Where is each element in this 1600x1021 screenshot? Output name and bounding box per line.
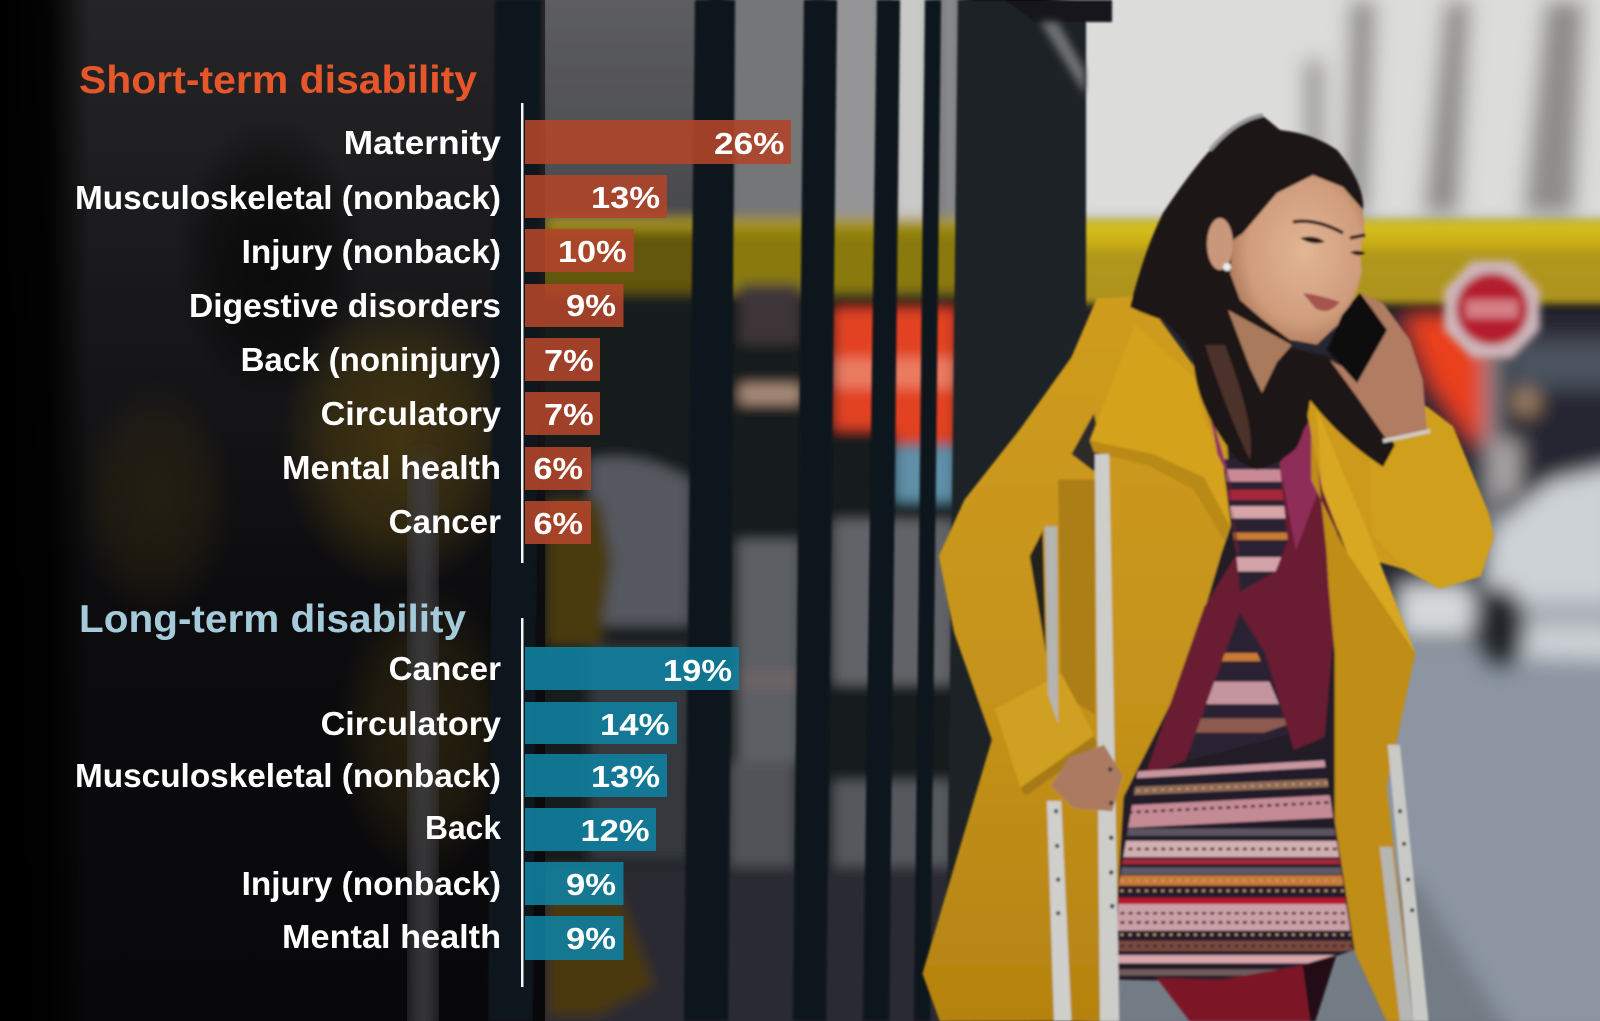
category labels: Circulatory — [321, 705, 502, 742]
lower second crutch — [1047, 801, 1071, 1021]
face — [1230, 175, 1365, 345]
dark slit beside sleeve — [1030, 531, 1046, 653]
bars — [525, 120, 791, 544]
category labels — [75, 650, 502, 955]
heading: short-term disability: Short-term disability — [79, 59, 477, 102]
category labels: Musculoskeletal (nonback) — [75, 757, 501, 794]
head and hair — [1130, 115, 1430, 470]
category labels — [75, 124, 502, 540]
yellow canopy — [1070, 220, 1600, 304]
percentage values: 10% — [558, 234, 626, 269]
phone — [1327, 293, 1387, 383]
category labels: Cancer — [389, 650, 501, 687]
burgundy vest — [1145, 403, 1338, 777]
category labels: Musculoskeletal (nonback) — [75, 179, 501, 216]
percentage values: 6% — [534, 451, 583, 486]
percentage values: 13% — [591, 180, 660, 215]
torso base — [1112, 408, 1357, 982]
category labels: Digestive disorders — [189, 287, 501, 324]
right crutches — [1388, 745, 1429, 1021]
hand holding phone — [1330, 292, 1427, 440]
stop sign — [1444, 261, 1540, 358]
category labels: Cancer — [389, 503, 501, 540]
brows and eyes — [1293, 221, 1365, 238]
bracelet — [1383, 431, 1430, 441]
percentage values: 7% — [544, 397, 594, 432]
sleeve cuff — [995, 673, 1094, 788]
percentage values — [566, 653, 732, 956]
earring — [1223, 263, 1231, 271]
blurred right street background — [1060, 0, 1600, 1021]
underarm pad — [1071, 413, 1102, 471]
striped top — [1189, 459, 1296, 760]
tights — [1154, 961, 1310, 1021]
panel: short-term disability chart — [75, 59, 791, 563]
category labels: Circulatory — [321, 395, 502, 432]
category labels: Injury (nonback) — [242, 233, 501, 270]
category labels: Back (noninjury) — [241, 341, 501, 378]
percentage values: 7% — [544, 343, 594, 378]
category labels: Injury (nonback) — [242, 865, 501, 902]
coat right panel — [1311, 406, 1415, 1021]
mouth — [1303, 293, 1340, 311]
window frame bars — [488, 0, 1112, 1021]
left darkened panel with reflection of woman — [0, 0, 545, 1021]
percentage values: 9% — [566, 867, 616, 902]
percentage values: 14% — [600, 707, 670, 742]
percentage values: 26% — [714, 126, 784, 161]
percentage values: 9% — [566, 288, 616, 323]
striped skirt — [1112, 753, 1357, 990]
category labels: Back — [425, 809, 502, 846]
axis line — [521, 618, 524, 987]
bars — [525, 647, 739, 960]
blurred awning highlight — [1040, 22, 1085, 95]
panel: long-term disability chart — [75, 598, 739, 987]
main crutch — [1095, 454, 1119, 1021]
neck — [1228, 310, 1292, 393]
shading between crutches — [1058, 480, 1095, 714]
heading: long-term disability: Long-term disability — [79, 598, 466, 641]
percentage values: 19% — [663, 653, 732, 688]
percentage values: 9% — [566, 921, 616, 956]
percentage values: 13% — [591, 759, 660, 794]
percentage values: 6% — [534, 506, 583, 541]
percentage values — [534, 126, 784, 541]
category labels: Mental health — [282, 918, 501, 955]
category labels: Maternity — [344, 124, 502, 161]
hand on crutch — [1051, 745, 1122, 811]
crutch holes — [1054, 767, 1414, 915]
percentage values: 12% — [580, 813, 650, 848]
ear — [1207, 218, 1233, 270]
coat collar — [1090, 324, 1235, 526]
coat left body — [922, 296, 1233, 1021]
axis line — [521, 103, 524, 563]
woman with crutches — [922, 115, 1494, 1021]
category labels: Mental health — [282, 449, 501, 486]
window glass reflections — [535, 0, 975, 1021]
second crutch — [1045, 527, 1058, 724]
hair — [1130, 116, 1395, 470]
